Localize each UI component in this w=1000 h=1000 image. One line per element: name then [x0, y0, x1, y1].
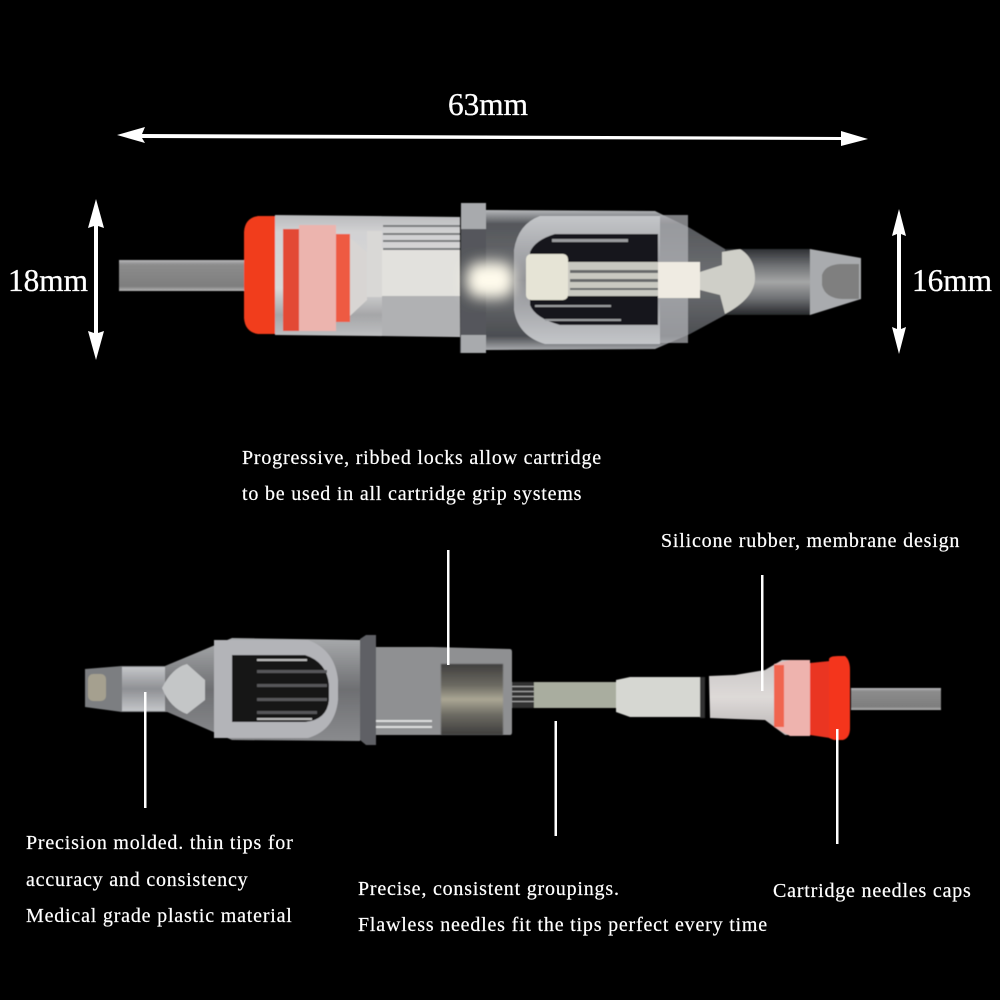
barrel	[376, 647, 512, 735]
window ribs	[257, 670, 327, 714]
stem	[851, 688, 941, 710]
red threads	[810, 661, 830, 738]
arrow: 18mm height	[88, 199, 104, 360]
clear barrel	[275, 215, 460, 337]
grip body taper	[165, 638, 360, 741]
callout text: ribbed locks: Progressive, ribbed locks allow cartridge	[242, 447, 602, 469]
needle bar	[534, 682, 616, 708]
dimension label: 18mm: 18mm	[8, 263, 88, 298]
glow at flange	[466, 262, 514, 298]
callout text: ribbed locks: to be used in all cartridge grip systems	[242, 483, 582, 505]
callout text: silicone rubber: Silicone rubber, membrane design	[661, 530, 960, 552]
window ribs	[535, 239, 628, 321]
callout text: groupings: Precise, consistent groupings.	[358, 878, 620, 900]
clear nose	[700, 249, 755, 314]
arrow: 16mm height	[892, 209, 906, 354]
window frame	[514, 216, 660, 344]
callout text: precision molded: Precision molded. thin tips for	[26, 832, 294, 854]
flange	[360, 635, 376, 745]
callout text: needle caps: Cartridge needles caps	[773, 880, 972, 902]
flange	[460, 203, 486, 353]
inner block	[526, 254, 568, 300]
window	[530, 234, 658, 325]
silicone membrane	[709, 660, 810, 735]
inner needle bar	[565, 262, 660, 296]
window frame	[214, 640, 338, 738]
barrel ribs	[383, 225, 460, 250]
inner square	[367, 231, 382, 297]
disassembled cartridge	[85, 635, 941, 745]
needle stem	[119, 260, 244, 291]
shoulder bands	[660, 215, 688, 343]
assembled cartridge	[119, 203, 861, 353]
red cap	[829, 656, 850, 740]
dimension label: 16mm: 16mm	[912, 263, 992, 298]
window	[232, 655, 329, 722]
arrow: 63mm length	[117, 127, 868, 146]
grip body	[486, 210, 725, 350]
callout text: groupings	[358, 878, 768, 936]
dark frosted section	[441, 664, 503, 735]
needle bar block	[616, 677, 705, 717]
needles	[512, 682, 535, 708]
callout text: groupings: Flawless needles fit the tips perfect every time	[358, 914, 768, 936]
callout text: precision molded	[26, 832, 294, 927]
callout text: precision molded: accuracy and consistency	[26, 869, 248, 891]
leader lines	[144, 550, 838, 844]
pink thread section	[774, 660, 810, 736]
dimension label: 63mm: 63mm	[448, 87, 528, 122]
red cap	[244, 216, 276, 334]
callout text: precision molded: Medical grade plastic material	[26, 905, 293, 927]
tip	[85, 666, 180, 712]
callout text: ribbed locks	[242, 447, 602, 505]
red threads seen through barrel	[283, 225, 367, 331]
nose	[162, 664, 205, 714]
tip	[725, 249, 810, 315]
